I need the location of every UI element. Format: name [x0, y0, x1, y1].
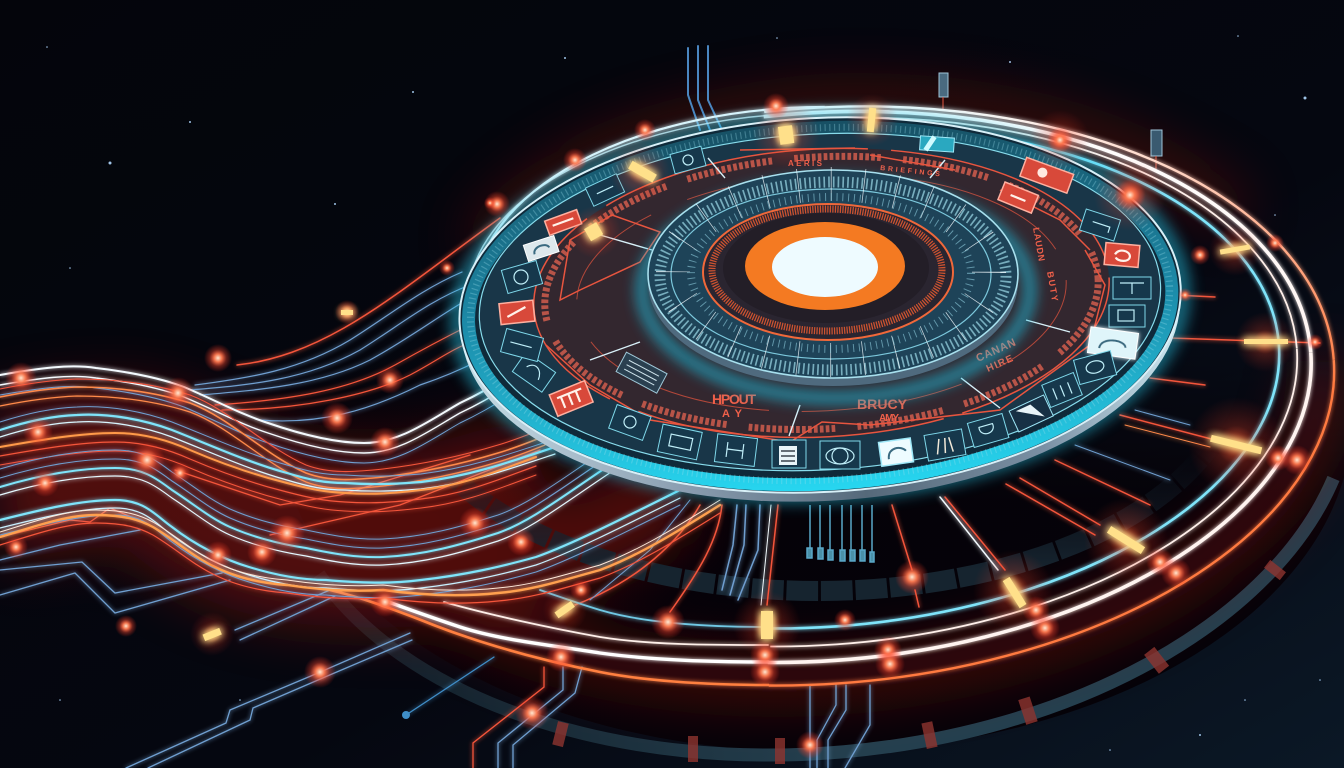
icon bottom 2: [820, 441, 860, 469]
ring: thin white lower left: [444, 602, 768, 645]
label: right band: LAUDN: [1031, 227, 1047, 262]
label: brucy: BRUCY: [857, 396, 908, 412]
label: canan: CANAN: [974, 337, 1018, 365]
icon top left: [670, 146, 706, 174]
icon white left: [523, 235, 559, 262]
icon hot upper left: [545, 210, 582, 235]
icon right hot: [1104, 243, 1140, 267]
icon bottom 5: [657, 424, 702, 460]
ring: thick white lower left: [383, 600, 768, 662]
label: top band: AERIS: [788, 159, 823, 168]
hub red ticks: [712, 209, 942, 331]
core orange: [745, 222, 905, 310]
icon ring: [499, 136, 1151, 469]
hub ring: [671, 189, 991, 359]
disc body: [450, 99, 1190, 511]
label: brucy sub: AMY: [879, 413, 899, 424]
hub side: [648, 178, 1018, 386]
top connector wires and pins: [688, 46, 1162, 172]
cyan flow three: [0, 490, 680, 583]
upper fine lines: [190, 218, 500, 421]
hub long ticks: [673, 184, 989, 360]
radial leads under disc: [575, 295, 1320, 612]
band divider spokes: [590, 158, 1070, 436]
icon upper right hot: [998, 182, 1038, 213]
main disc: [449, 99, 1192, 520]
flow line bundle: [0, 218, 720, 603]
icon top right hot: [1020, 157, 1074, 193]
icon bottom 4: [714, 434, 758, 466]
icon right white: [1087, 327, 1139, 359]
icon right 3: [1109, 305, 1145, 327]
disc rim: [451, 108, 1190, 520]
second orange flow: [0, 433, 536, 494]
icon right 1: [1079, 209, 1121, 241]
hub red inner: [703, 204, 953, 340]
label: input: HPOUT: [712, 391, 756, 407]
scale ticks: [461, 110, 1179, 498]
core white: [772, 237, 878, 297]
icon left 2: [501, 328, 543, 362]
icon right 4: [1074, 350, 1117, 384]
hub fine ticks: [691, 197, 971, 349]
ring: cyan: [340, 95, 1296, 659]
inner maroon band: [526, 134, 1117, 452]
ring: thick white: [304, 79, 1330, 695]
connector pins under disc: [807, 505, 874, 562]
outer rings: [286, 73, 1344, 719]
label: input sub: AY: [722, 408, 743, 420]
cyan flow: [0, 415, 555, 484]
label: top right band: BRIEFINGS: [880, 165, 941, 178]
ring: cyan lower left: [540, 590, 770, 627]
hub outer ticks: [660, 182, 1006, 370]
hub dark center: [723, 213, 929, 323]
hub: [642, 170, 1030, 398]
base rim band: [250, 41, 1344, 768]
icon lower right: [967, 414, 1009, 447]
glow halos: [190, 94, 1295, 659]
lower cyan flow: [0, 445, 640, 557]
icon top cyan: [920, 136, 954, 152]
icon right 5: [1042, 373, 1082, 407]
lower orange flow: [0, 505, 720, 595]
icon right 2: [1113, 277, 1151, 299]
ring arcs: top left: [468, 107, 1182, 487]
label: hire: HIRE: [985, 353, 1015, 375]
icon left 1: [512, 352, 556, 392]
red bracket outlines: [546, 148, 1105, 442]
icon bottom 6: [609, 405, 651, 440]
ring: orange outer lower left: [330, 590, 769, 685]
disc halo: [449, 99, 1192, 513]
disc labels: [712, 159, 1060, 424]
hub top: [648, 170, 1018, 378]
icon hot left: [499, 300, 535, 325]
blue node: [402, 711, 410, 719]
lower base platform: [250, 41, 1344, 768]
icon hot lower left: [549, 381, 593, 416]
icon upper left: [585, 174, 625, 206]
outer cell ring: [398, 139, 1238, 591]
orange flow: [0, 387, 545, 480]
icon band: [471, 116, 1169, 488]
lower circuit traces: [0, 450, 870, 768]
ring: orange outer: [286, 73, 1344, 719]
icon dark document: [616, 352, 667, 393]
icon bottom 3: [772, 440, 806, 468]
base rim tick marks: [552, 560, 1286, 764]
icon bottom 1: [878, 438, 914, 466]
label: right band two: BUTY: [1045, 271, 1060, 302]
glow bars: [203, 108, 1288, 641]
ring: thin white: [321, 86, 1315, 678]
red label ring: [538, 143, 1105, 443]
icon left 3: [501, 261, 543, 293]
hub glow: [642, 182, 1030, 398]
band dividers: [571, 162, 1072, 424]
icon lower right two: [924, 429, 966, 461]
white flow: [0, 366, 510, 443]
cyan band: [459, 110, 1181, 502]
icon white flag: [1009, 395, 1053, 432]
